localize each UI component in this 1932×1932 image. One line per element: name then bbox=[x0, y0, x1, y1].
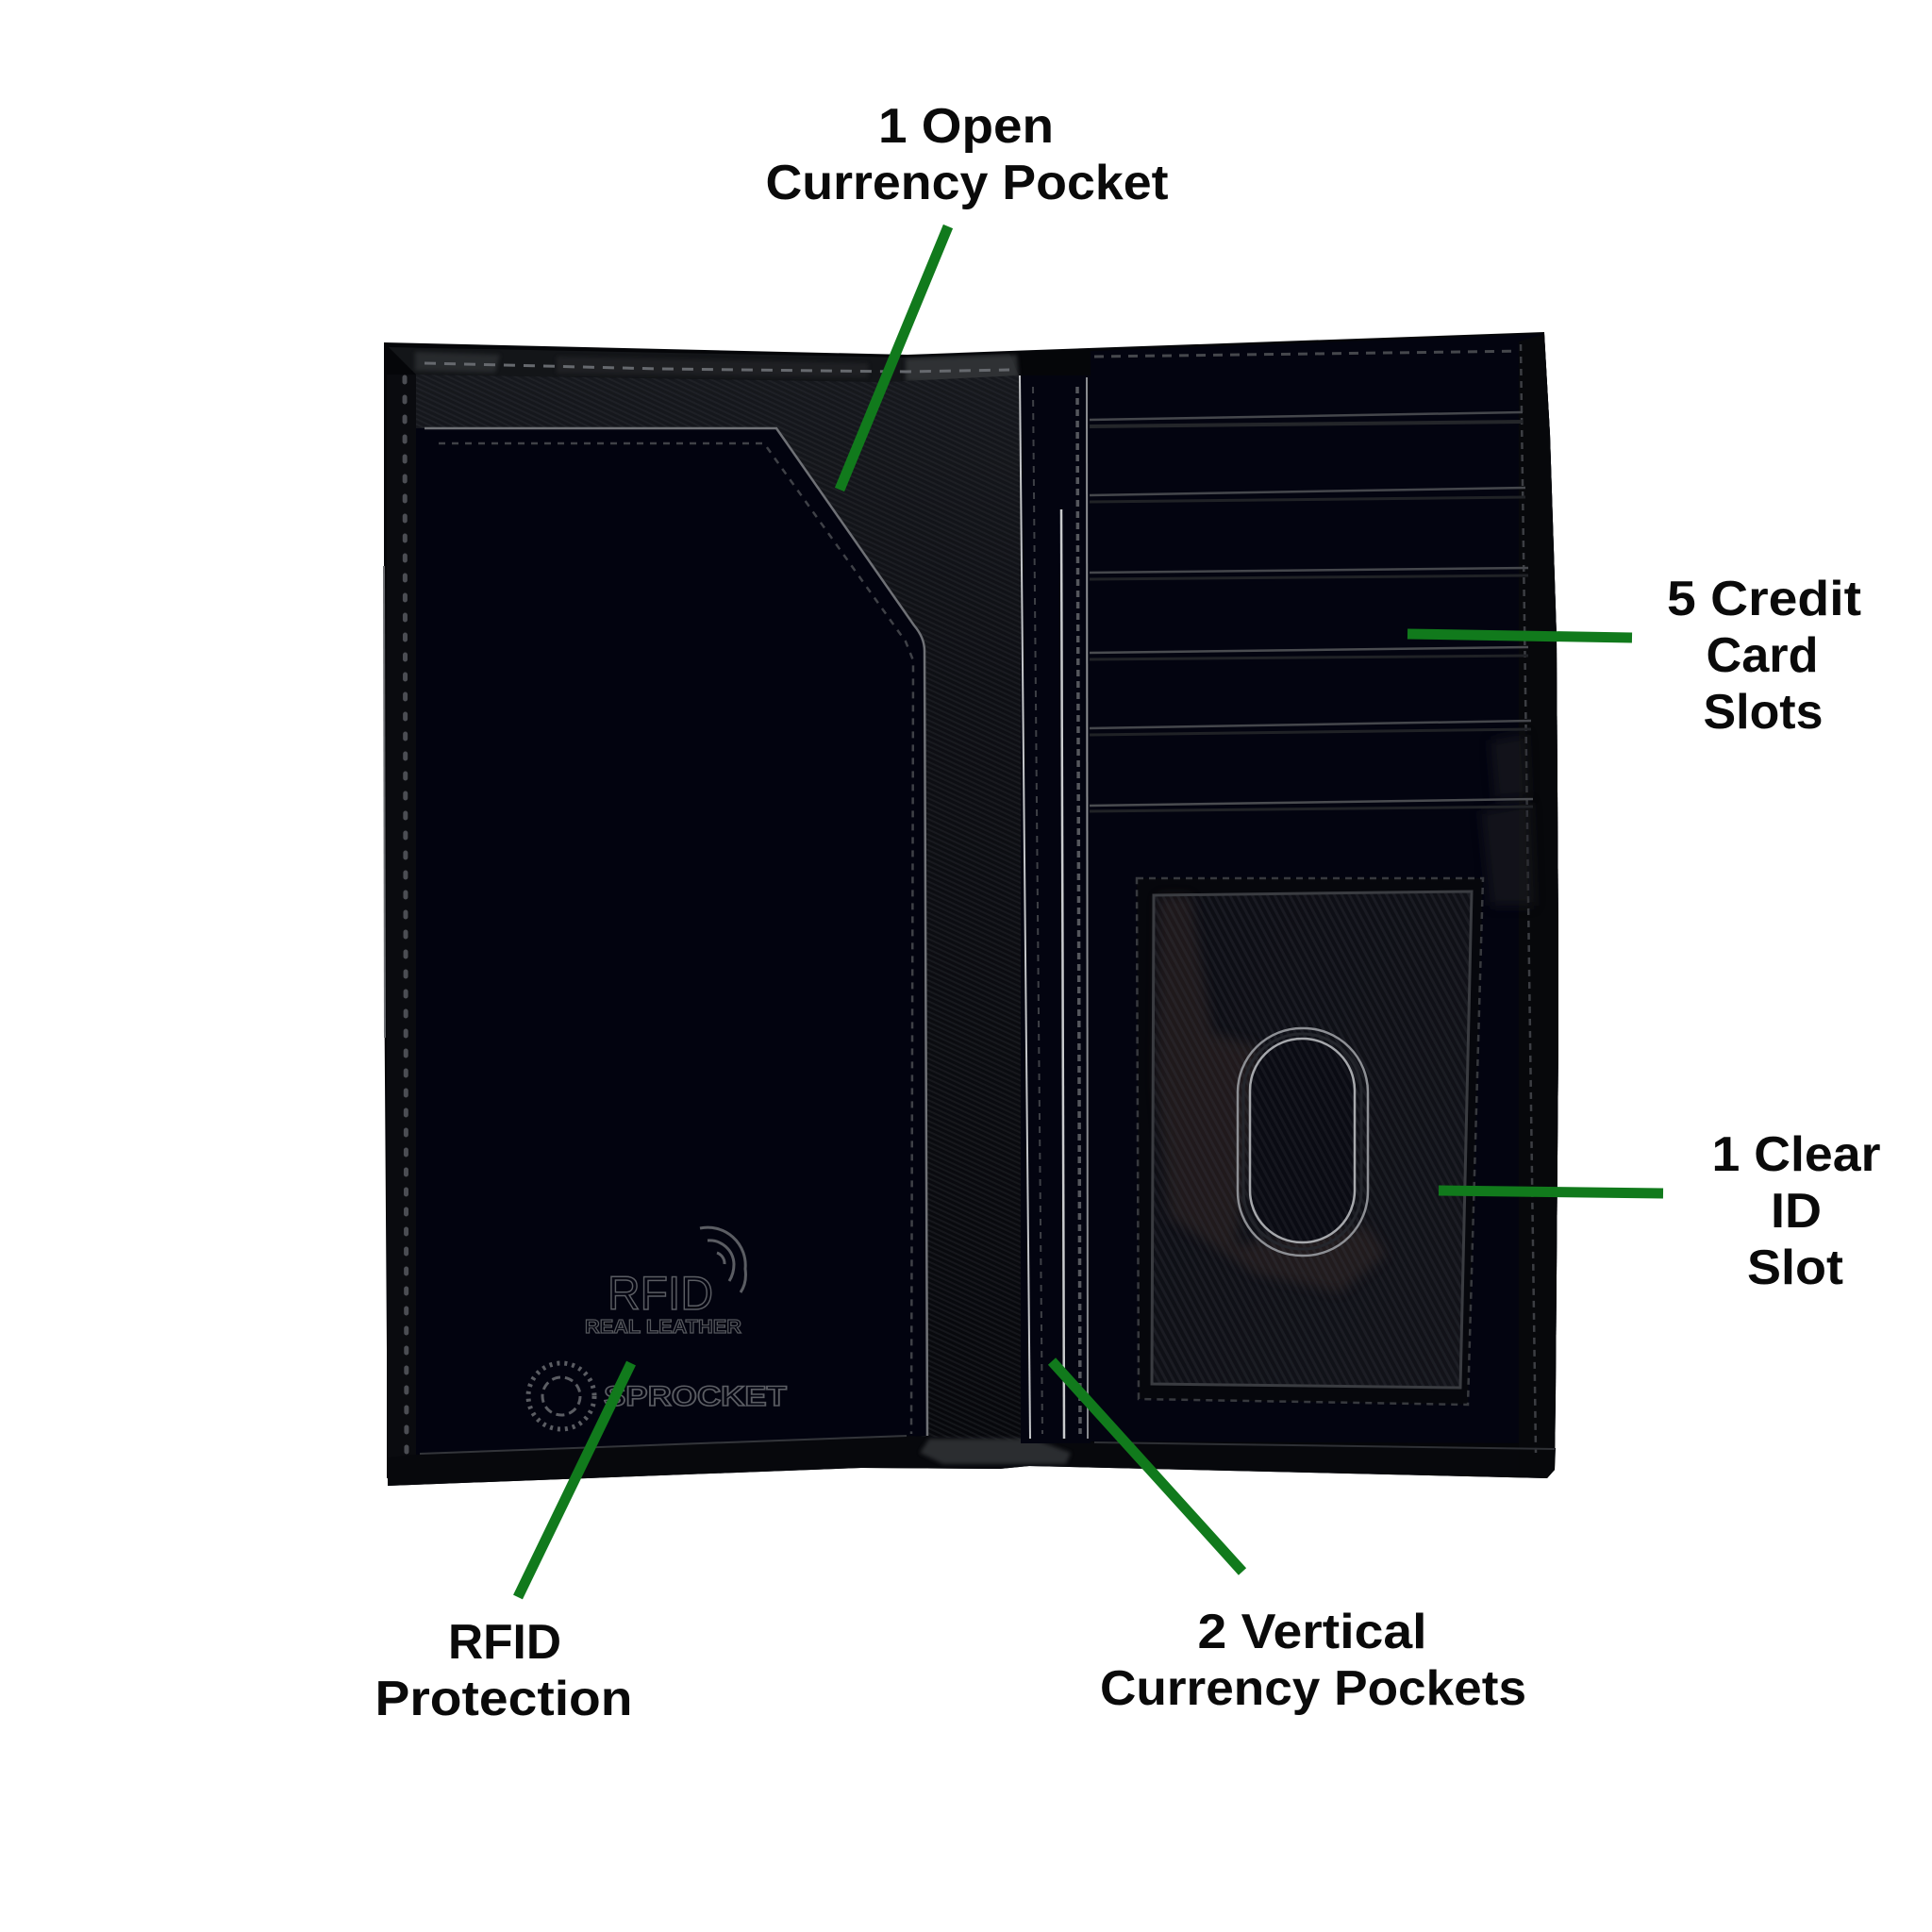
arrow: clear ID slot bbox=[1439, 1191, 1663, 1193]
bottom leather band bbox=[388, 1436, 1556, 1486]
label: 1 open currency pocket: Currency Pocket bbox=[766, 156, 1168, 210]
label: 5 credit card slots: Card bbox=[1706, 628, 1819, 683]
label: 1 open currency pocket bbox=[766, 99, 1168, 210]
vertical currency pockets bbox=[1020, 375, 1091, 1443]
label: RFID protection: RFID bbox=[448, 1615, 561, 1670]
sprocket emboss text: SPROCKET bbox=[604, 1381, 787, 1412]
label: 2 vertical currency pockets bbox=[1100, 1605, 1526, 1716]
signal waves icon bbox=[700, 1227, 745, 1292]
real leather emboss text: REAL LEATHER bbox=[585, 1317, 742, 1338]
RFID emboss text: RFID bbox=[608, 1267, 713, 1320]
lining fabric: open currency pocket bbox=[416, 375, 1028, 1443]
label: 1 clear ID slot: Slot bbox=[1747, 1241, 1843, 1295]
brown reflection bbox=[1157, 896, 1387, 1292]
sprocket gear logo bbox=[528, 1363, 594, 1429]
label: 1 clear ID slot: 1 Clear bbox=[1711, 1127, 1881, 1182]
clear ID slot bbox=[1137, 878, 1483, 1405]
label: 2 vertical currency pockets: 2 Vertical bbox=[1198, 1605, 1426, 1659]
top leather band bbox=[389, 347, 1019, 382]
5 credit card slots bbox=[1090, 412, 1533, 811]
label: 2 vertical currency pockets: Currency Pockets bbox=[1100, 1661, 1526, 1716]
label: 1 clear ID slot bbox=[1711, 1127, 1881, 1295]
wallet bbox=[384, 332, 1558, 1486]
RFID leather pocket panel bbox=[416, 428, 927, 1457]
label: RFID protection: Protection bbox=[375, 1672, 632, 1726]
arrow: open currency pocket bbox=[840, 226, 948, 490]
wallet body bbox=[384, 332, 1558, 1486]
label: 5 credit card slots bbox=[1667, 572, 1861, 740]
label: 1 clear ID slot: ID bbox=[1771, 1184, 1822, 1239]
label: 5 credit card slots: Slots bbox=[1704, 685, 1823, 740]
label: 1 open currency pocket: 1 Open bbox=[878, 99, 1054, 154]
label: RFID protection bbox=[375, 1615, 632, 1726]
arrow: vertical currency pockets bbox=[1052, 1361, 1242, 1572]
right card side panel bbox=[1091, 334, 1558, 1443]
arrow: RFID protection bbox=[518, 1363, 631, 1597]
ID window thumb oval bbox=[1238, 1028, 1368, 1256]
embossed RFID logo bbox=[528, 1227, 787, 1429]
label: 5 credit card slots: 5 Credit bbox=[1667, 572, 1861, 626]
arrow: credit card slots bbox=[1407, 634, 1632, 638]
left leather band bbox=[387, 375, 416, 1478]
